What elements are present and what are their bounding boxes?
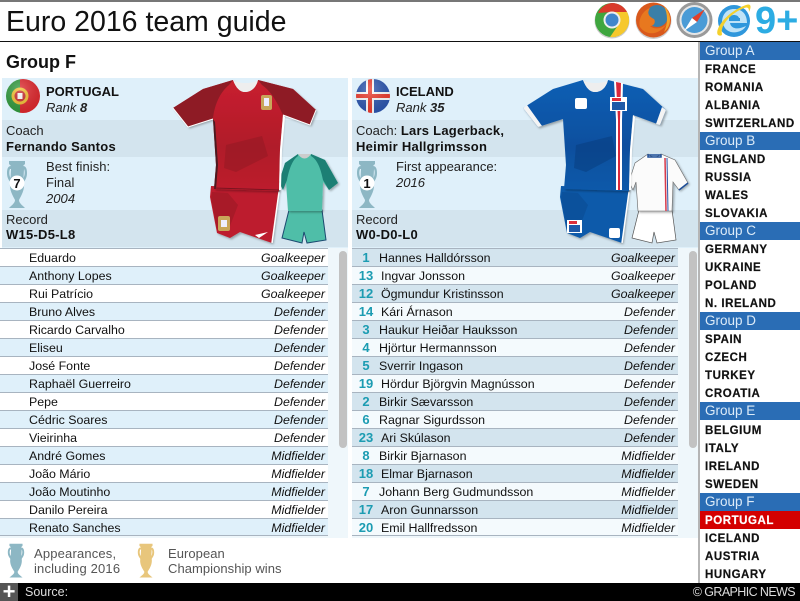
row: Rui Patrício: [29, 287, 93, 301]
sidebar: groups: CZECH: [705, 352, 747, 364]
row: Eduardo: [29, 251, 76, 265]
plus button: [0, 583, 18, 601]
row: Defender: [624, 323, 675, 337]
row: Renato Sanches: [29, 521, 121, 535]
wins text: Championship wins: [168, 561, 282, 576]
row: Birkir Bjarnason: [379, 449, 466, 463]
row: Sverrir Ingason: [379, 359, 463, 373]
row: Anthony Lopes: [29, 269, 112, 283]
sidebar: groups: AUSTRIA: [705, 551, 760, 563]
row: Midfielder: [271, 521, 325, 535]
row: 1: [362, 250, 370, 265]
row: [352, 518, 678, 536]
row: 3: [362, 322, 370, 337]
record value: W0-D0-L0: [356, 227, 418, 242]
group B: [700, 132, 800, 150]
row: Goalkeeper: [611, 287, 675, 301]
footer: [0, 583, 800, 601]
sidebar: groups: WALES: [705, 190, 749, 202]
row: 14: [359, 304, 373, 319]
header rule: [0, 41, 800, 42]
first appearance: First appearance:: [396, 159, 497, 174]
row: Ari Skúlason: [381, 431, 451, 445]
coach label: Coach: [6, 123, 44, 138]
row: [352, 302, 678, 320]
source: Source:: [25, 585, 68, 599]
row: Midfielder: [621, 449, 675, 463]
appearances text: Appearances,: [34, 546, 116, 561]
selected team: PORTUGAL: [705, 515, 774, 527]
row: João Moutinho: [29, 485, 110, 499]
row: Midfielder: [271, 485, 325, 499]
row: [0, 446, 328, 464]
best finish: [46, 159, 110, 206]
row: Defender: [624, 341, 675, 355]
sidebar: groups: ITALY: [705, 443, 739, 455]
row: 19: [359, 376, 373, 391]
group A: Group A: [705, 43, 755, 58]
second kit shorts: [632, 210, 676, 243]
row: Ragnar Sigurdsson: [379, 413, 485, 427]
row: Aron Gunnarsson: [381, 503, 478, 517]
row: Goalkeeper: [611, 251, 675, 265]
row: Defender: [274, 377, 325, 391]
row: [352, 338, 678, 356]
icon: safari: [676, 2, 712, 38]
main shirt: [173, 80, 316, 191]
row: Goalkeeper: [261, 287, 325, 301]
row: 7: [362, 484, 370, 499]
row: Ingvar Jonsson: [381, 269, 465, 283]
second kit shirt: [279, 154, 338, 211]
row: Defender: [274, 341, 325, 355]
team name: PORTUGAL: [46, 84, 119, 99]
top rule: [0, 0, 800, 2]
row: Raphaël Guerreiro: [29, 377, 131, 391]
group F: [700, 493, 800, 511]
sidebar: groups: ALBANIA: [705, 100, 761, 112]
record label: Record: [6, 212, 48, 227]
row: [0, 302, 328, 320]
row: 8: [362, 448, 370, 463]
second kit shorts: [282, 210, 326, 243]
row: Midfielder: [621, 521, 675, 535]
row: [0, 428, 328, 446]
row: [352, 392, 678, 410]
row: Midfielder: [621, 467, 675, 481]
group D: [700, 312, 800, 330]
row: [352, 446, 678, 464]
row: Midfielder: [621, 485, 675, 499]
row: 23: [359, 430, 373, 445]
row: 17: [359, 502, 373, 517]
row: Emil Hallfredsson: [381, 521, 477, 535]
row: João Mário: [29, 467, 90, 481]
row: Kári Árnason: [381, 305, 453, 319]
row: Midfielder: [621, 503, 675, 517]
coach second name: Heimir Hallgrimsson: [356, 139, 487, 154]
title: Euro 2016 team guide: [6, 6, 286, 38]
sidebar: groups: SLOVAKIA: [705, 208, 768, 220]
row: 6: [362, 412, 370, 427]
icon: firefox: [636, 2, 672, 39]
row: Haukur Heiðar Hauksson: [379, 323, 517, 337]
row: André Gomes: [29, 449, 105, 463]
row: Goalkeeper: [261, 251, 325, 265]
sidebar: groups: GERMANY: [705, 244, 768, 256]
row: Defender: [274, 359, 325, 373]
icon: wins trophy: [138, 544, 154, 578]
row: Defender: [624, 395, 675, 409]
sidebar: groups: UKRAINE: [705, 262, 761, 274]
row: Defender: [274, 395, 325, 409]
group heading: Group F: [6, 52, 76, 72]
sidebar: groups: IRELAND: [705, 461, 760, 473]
row: [352, 500, 678, 518]
row: [352, 464, 678, 482]
row: Bruno Alves: [29, 305, 95, 319]
row: 13: [359, 268, 373, 283]
sidebar: groups: FRANCE: [705, 64, 756, 76]
icon: Iceland trophy appearances 1: [357, 161, 377, 208]
group A: [700, 42, 800, 60]
row: Birkir Sævarsson: [379, 395, 473, 409]
row: [0, 500, 328, 518]
wins text: European: [168, 546, 225, 561]
row: [0, 464, 328, 482]
coach name: Fernando Santos: [6, 139, 116, 154]
first appearance: [396, 159, 497, 190]
row: Defender: [274, 305, 325, 319]
row: Eliseu: [29, 341, 63, 355]
team name: ICELAND: [396, 84, 454, 99]
icon: Iceland trophy appearances 1: 1: [363, 176, 371, 191]
icon: chrome: [594, 3, 630, 38]
panel: Portugal: [2, 78, 348, 248]
sidebar: groups: [698, 42, 800, 583]
browser icons: [594, 0, 798, 41]
jersey: Portugal kit: [172, 80, 340, 245]
sidebar: groups: N. IRELAND: [705, 298, 776, 310]
rank: Rank 8: [46, 100, 87, 115]
sidebar: groups: SWEDEN: [705, 479, 759, 491]
row: Defender: [274, 413, 325, 427]
sidebar: groups: TURKEY: [705, 370, 756, 382]
row: [0, 356, 328, 374]
sidebar: groups: HUNGARY: [705, 569, 767, 581]
row: [352, 356, 678, 374]
row: Vieirinha: [29, 431, 77, 445]
legend: [8, 544, 282, 578]
icon: Portugal trophy appearances 7: [7, 161, 27, 208]
group E: [700, 402, 800, 420]
row: Goalkeeper: [611, 269, 675, 283]
scrollbar: [689, 251, 697, 448]
row: [352, 374, 678, 392]
icon: Portugal trophy appearances 7: 7: [13, 176, 21, 191]
panel: Iceland: [352, 78, 698, 248]
row: [0, 266, 328, 284]
sidebar: groups: POLAND: [705, 280, 757, 292]
sidebar: groups: CROATIA: [705, 388, 760, 400]
row: Ricardo Carvalho: [29, 323, 125, 337]
sidebar: groups: SPAIN: [705, 334, 742, 346]
coach: Coach: Lars Lagerback,: [356, 123, 504, 138]
row: Ögmundur Kristinsson: [381, 287, 504, 301]
icon: internet explorer: [717, 5, 751, 37]
row: [352, 320, 678, 338]
record label: Record: [356, 212, 398, 227]
row: Hjörtur Hermannsson: [379, 341, 497, 355]
row: [0, 518, 328, 536]
row: 12: [359, 286, 373, 301]
row: [0, 482, 328, 500]
row: Defender: [624, 359, 675, 373]
icon: appearances trophy: [8, 544, 24, 578]
group F: Group F: [705, 494, 755, 509]
row: [0, 410, 328, 428]
row: Defender: [274, 323, 325, 337]
jersey: Iceland kit: [523, 80, 690, 245]
row: [0, 392, 328, 410]
second kit shirt: [629, 154, 688, 211]
group D: Group D: [705, 313, 756, 328]
row: Hannes Halldórsson: [379, 251, 491, 265]
main shorts: [210, 186, 279, 243]
row: Elmar Bjarnason: [381, 467, 473, 481]
label: 9+: 9+: [755, 0, 798, 41]
table: Iceland squad: [352, 248, 698, 538]
table: Portugal squad: [0, 248, 348, 538]
record value: W15-D5-L8: [6, 227, 75, 242]
row: Goalkeeper: [261, 269, 325, 283]
icon: Portugal flag: [6, 79, 40, 113]
row: [352, 266, 678, 284]
selected team: [700, 511, 800, 529]
row: [0, 248, 328, 266]
appearances text: [34, 546, 120, 576]
group C: Group C: [705, 223, 756, 238]
row: 18: [359, 466, 373, 481]
group B: Group B: [705, 133, 755, 148]
row: [0, 374, 328, 392]
first appearance: 2016: [396, 175, 425, 190]
row: Danilo Pereira: [29, 503, 108, 517]
credit: © GRAPHIC NEWS: [693, 585, 795, 599]
row: [352, 284, 678, 302]
row: Cédric Soares: [29, 413, 108, 427]
row: [352, 428, 678, 446]
scrollbar: [339, 251, 347, 448]
row: Defender: [624, 413, 675, 427]
main shorts: [560, 186, 629, 243]
row: [352, 482, 678, 500]
row: Pepe: [29, 395, 58, 409]
row: Midfielder: [271, 467, 325, 481]
row: [352, 410, 678, 428]
row: 4: [362, 340, 370, 355]
main shirt: [523, 80, 666, 191]
row: [352, 248, 678, 266]
row: José Fonte: [29, 359, 90, 373]
row: [0, 284, 328, 302]
row: 20: [359, 520, 373, 535]
sidebar: groups: SWITZERLAND: [705, 118, 795, 130]
row: Hördur Björgvin Magnússon: [381, 377, 535, 391]
row: 5: [362, 358, 370, 373]
rank: Rank 35: [396, 100, 444, 115]
row: Defender: [624, 305, 675, 319]
row: 2: [362, 394, 370, 409]
wins text: [168, 546, 282, 576]
row: [0, 338, 328, 356]
group E: Group E: [705, 403, 755, 418]
appearances text: including 2016: [34, 561, 120, 576]
sidebar: groups: ICELAND: [705, 533, 760, 545]
sidebar: groups: BELGIUM: [705, 425, 762, 437]
sidebar: groups: RUSSIA: [705, 172, 752, 184]
group C: [700, 222, 800, 240]
row: Midfielder: [271, 503, 325, 517]
row: [0, 320, 328, 338]
row: Defender: [274, 431, 325, 445]
best finish: Best finish:: [46, 159, 110, 174]
icon: Iceland flag: [356, 79, 390, 113]
best finish: 2004: [46, 191, 75, 206]
row: Defender: [624, 431, 675, 445]
row: Midfielder: [271, 449, 325, 463]
row: Johann Berg Gudmundsson: [379, 485, 533, 499]
best finish: Final: [46, 175, 74, 190]
row: Defender: [624, 377, 675, 391]
sidebar: groups: ROMANIA: [705, 82, 764, 94]
sidebar: groups: ENGLAND: [705, 154, 766, 166]
